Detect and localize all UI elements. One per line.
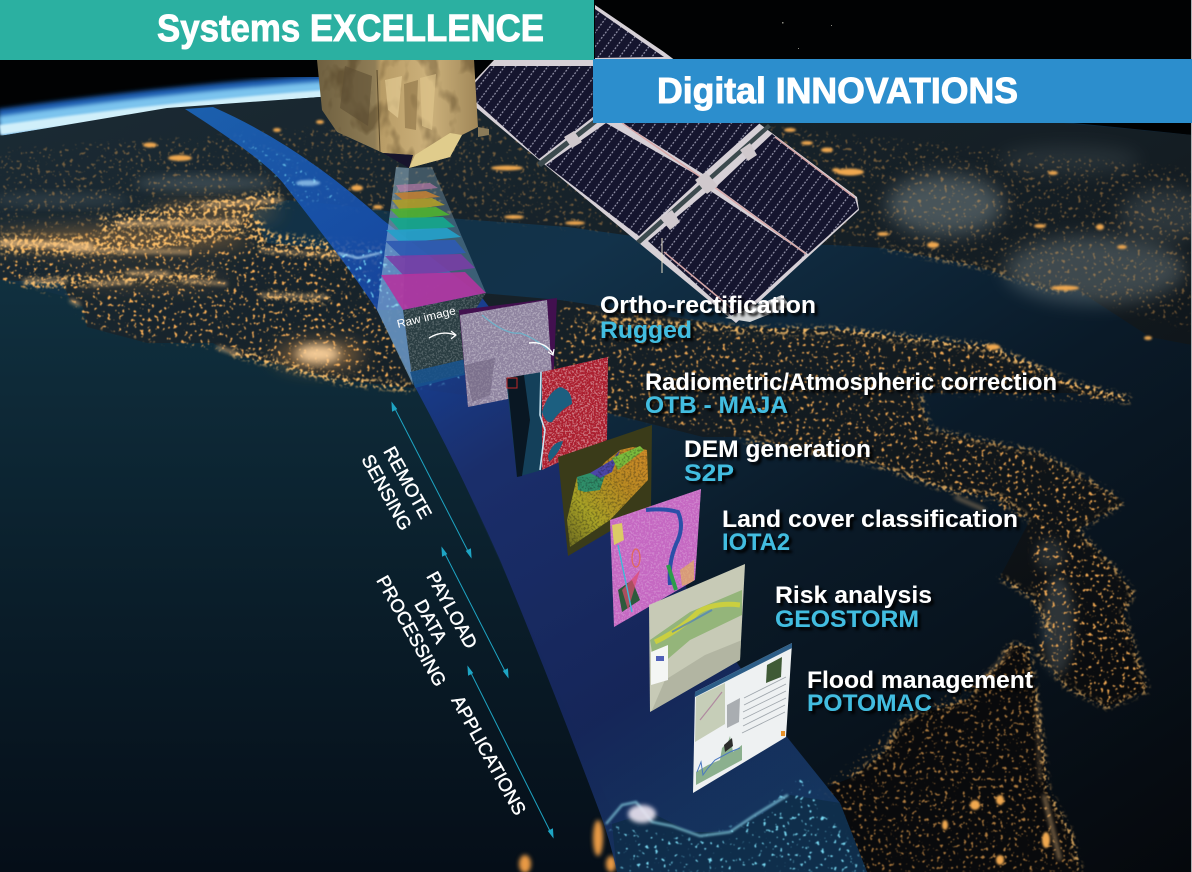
panel: flood management dashboard [693,643,792,793]
arrow: ortho to radiometric [529,343,553,354]
stars [782,22,832,49]
text: PAYLOAD DATA PROCESSING: DATA [411,596,452,647]
text: PAYLOAD DATA PROCESSING: PROCESSING [373,572,451,690]
arrow: applications range [468,667,553,837]
text: REMOTE SENSING: REMOTE [380,443,436,522]
upper swath coast highlights [338,253,380,258]
atmosphere glow arc [0,88,340,130]
label: risk analysis: Risk analysis [775,582,932,609]
label: radiometric correction [645,369,1057,419]
panel: DEM generation image [558,425,652,556]
raw image caption and curved arrows [396,305,554,355]
bright coast highlight [606,795,788,836]
arrow: remote sensing range [392,403,471,557]
label: DEM generation: DEM generation [684,436,871,463]
pink seam lines [622,123,855,312]
label: land cover classification: IOTA2 [722,529,790,556]
label: DEM generation [684,436,871,487]
heading banner: Systems EXCELLENCE [0,0,594,60]
heading banner: Digital INNOVATIONS: Digital INNOVATIONS [657,70,1018,111]
label: radiometric correction: Radiometric/Atmospheric correction [645,369,1057,396]
panel: risk analysis map [649,564,745,715]
dense city lights [0,186,1152,872]
panel: land cover classification map [610,489,702,628]
left sea shading [0,280,640,872]
side fitting [478,127,489,137]
array frame [461,5,859,323]
hinge gaps [537,120,597,167]
label: radiometric correction: OTB - MAJA [645,392,788,419]
arrow: payload data processing range [442,548,508,677]
panel: ortho-rectified image [459,298,557,408]
bright city streaks [0,200,1060,860]
raw image caption and curved arrows: Raw image [396,305,457,331]
land: southern peninsula [820,645,1080,872]
heading banner: Systems EXCELLENCE: Systems EXCELLENCE [157,8,544,50]
text: PAYLOAD DATA PROCESSING [373,568,482,690]
edge strips [1191,0,1192,872]
satellite gold body [317,60,489,168]
land: France, Italy and the upper band [0,80,1192,707]
bright white coast city [628,805,656,823]
foil texture [317,60,479,168]
spectral layers [381,183,486,310]
panel: radiometric correction image [506,357,609,477]
heading banner: Digital INNOVATIONS [593,59,1192,123]
label: flood management: Flood management [807,667,1033,694]
swath coastline lights [242,140,865,872]
city glow: main metropolis [296,345,340,363]
body edge [377,70,380,152]
text: APPLICATIONS: APPLICATIONS [448,692,530,819]
arrow: raw to ortho [429,333,455,338]
warm glow over the lit regions [0,203,364,369]
solar cells [466,9,858,319]
text: REMOTE SENSING: SENSING [358,451,416,534]
label: flood management [807,667,1033,717]
label: ortho-rectification: Rugged [600,317,692,344]
bottom orange lights [519,820,616,872]
satellite swath band [185,107,867,872]
boom strut [662,238,663,273]
sensor beam with spectral layers [377,167,487,388]
foil creases [340,66,436,130]
lower sensor hood [383,153,413,168]
dark water-to-land area under swath at the bottom [612,795,867,872]
label: land cover classification: Land cover classification [722,506,1018,533]
city light spots [143,120,1152,865]
label: risk analysis: GEOSTORM [775,606,919,633]
label: land cover classification [722,506,1018,556]
label: flood management: POTOMAC [807,690,932,717]
text: REMOTE SENSING [358,443,436,534]
corner bracket [725,295,790,322]
clouds [0,146,1192,675]
label: ortho-rectification: Ortho-rectification [600,292,816,319]
raw image ground patch [377,293,487,388]
satellite solar array [461,5,859,323]
label: risk analysis [775,582,932,633]
hinge brackets [564,131,757,230]
label: DEM generation: S2P [684,460,734,487]
label: ortho-rectification [600,292,816,344]
text: PAYLOAD DATA PROCESSING: PAYLOAD [423,568,482,652]
